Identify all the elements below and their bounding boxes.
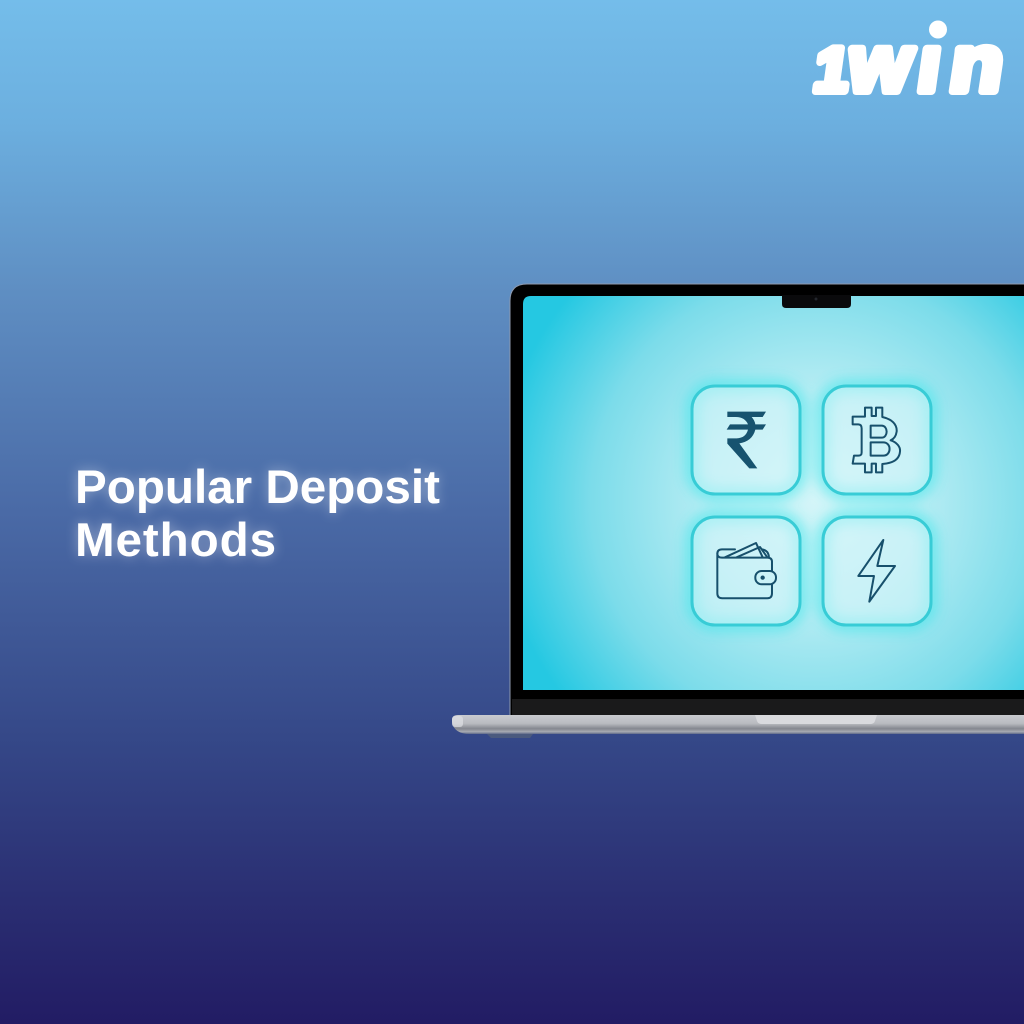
trackpad notch (755, 715, 877, 724)
logo: 1win: ı (912, 19, 947, 109)
title (75, 461, 440, 567)
screen (523, 296, 1024, 690)
card: bitcoin (823, 386, 931, 494)
laptop foot (487, 734, 533, 738)
title: Methods (75, 514, 277, 567)
laptop (452, 284, 1024, 738)
icon cards grid (692, 386, 931, 625)
logo: 1win: 1 (810, 36, 854, 105)
title: Methods (75, 514, 277, 567)
lower bezel strip (512, 699, 1024, 715)
base left highlight (452, 716, 463, 727)
title: Popular Deposit (75, 461, 440, 514)
camera notch (782, 295, 851, 308)
laptop base (452, 715, 1024, 734)
card: rupee (692, 386, 800, 494)
logo: 1win (810, 18, 1011, 109)
card: lightning bolt (823, 517, 931, 625)
card glow (692, 386, 931, 625)
laptop lid and bezel (510, 284, 1024, 716)
title: Popular Deposit (75, 461, 440, 514)
logo: 1win: n (944, 18, 1011, 108)
card: wallet (692, 517, 800, 625)
logo: 1win: w (842, 19, 919, 109)
